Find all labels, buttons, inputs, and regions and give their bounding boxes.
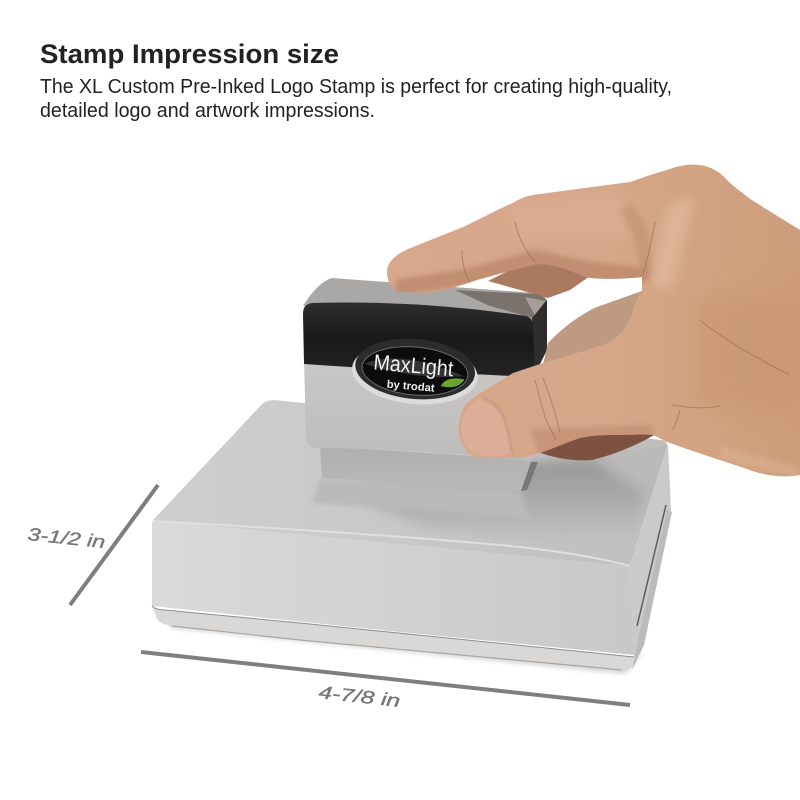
description text: The XL Custom Pre-Inked Logo Stamp is perfect for creating high-quality, bbox=[40, 76, 672, 98]
description text: detailed logo and artwork impressions. bbox=[40, 100, 375, 122]
handheld stamp bbox=[303, 278, 547, 461]
middle finger bbox=[543, 291, 642, 365]
dimension label: width: 4-7/8 in bbox=[318, 682, 401, 711]
base front face bbox=[152, 520, 634, 655]
stamp right side bbox=[532, 300, 547, 376]
ground shadow bbox=[170, 618, 645, 674]
side lip bbox=[632, 510, 672, 670]
dimension label: height: 3-1/2 in bbox=[27, 524, 106, 552]
base lip bbox=[152, 606, 634, 670]
index finger and back of hand bbox=[387, 165, 800, 476]
stamp neck bbox=[312, 446, 538, 518]
green leaf bbox=[441, 377, 464, 389]
large stamp base bbox=[152, 400, 672, 674]
logo wordmark: MaxLight bbox=[373, 349, 454, 381]
skin shading bbox=[395, 190, 800, 480]
side slot bbox=[637, 505, 666, 626]
dimension line: width bbox=[141, 652, 630, 705]
stamp grey body bbox=[304, 360, 535, 461]
stamp top face bbox=[303, 278, 547, 320]
lower finger under thumb bbox=[538, 425, 656, 460]
hand bbox=[387, 165, 800, 480]
description text bbox=[40, 76, 672, 122]
base right side bbox=[630, 444, 671, 657]
by trodat: by trodat bbox=[386, 379, 435, 395]
dimension line: height bbox=[70, 485, 158, 605]
title: Stamp Impression size bbox=[40, 39, 339, 69]
thumbnail bbox=[461, 398, 512, 457]
stamp black cap bbox=[303, 303, 535, 377]
base top face bbox=[153, 400, 668, 566]
knuckle creases bbox=[462, 222, 790, 440]
front ridge highlight bbox=[153, 521, 630, 566]
logo badge bbox=[349, 334, 481, 409]
second finger below index bbox=[488, 260, 590, 298]
